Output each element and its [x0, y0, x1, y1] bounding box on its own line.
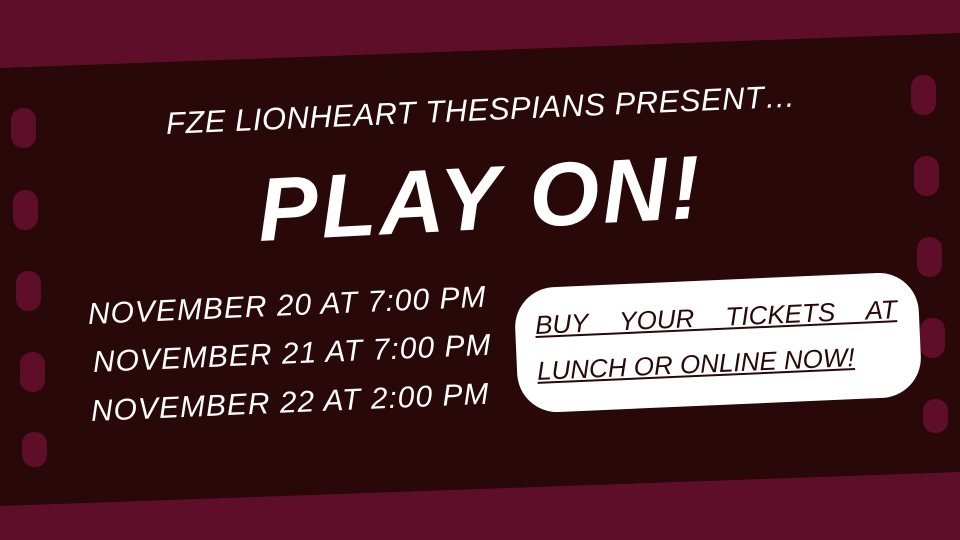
heading: PLAY ON!: PLAY ON! [255, 138, 706, 261]
dates: NOVEMBER 22 AT 2:00 PM [90, 378, 490, 428]
holes left [11, 108, 47, 467]
dates: NOVEMBER 21 AT 7:00 PM [92, 329, 492, 379]
dates: NOVEMBER 20 AT 7:00 PM [87, 281, 487, 331]
callout: tickets: BUY YOUR TICKETS AT LUNCH OR ONLINE NOW! [534, 294, 897, 386]
dates [87, 281, 492, 428]
holes right [911, 75, 948, 433]
title: FZE LIONHEART THESPIANS PRESENT… [165, 79, 797, 141]
callout: tickets [513, 271, 923, 414]
